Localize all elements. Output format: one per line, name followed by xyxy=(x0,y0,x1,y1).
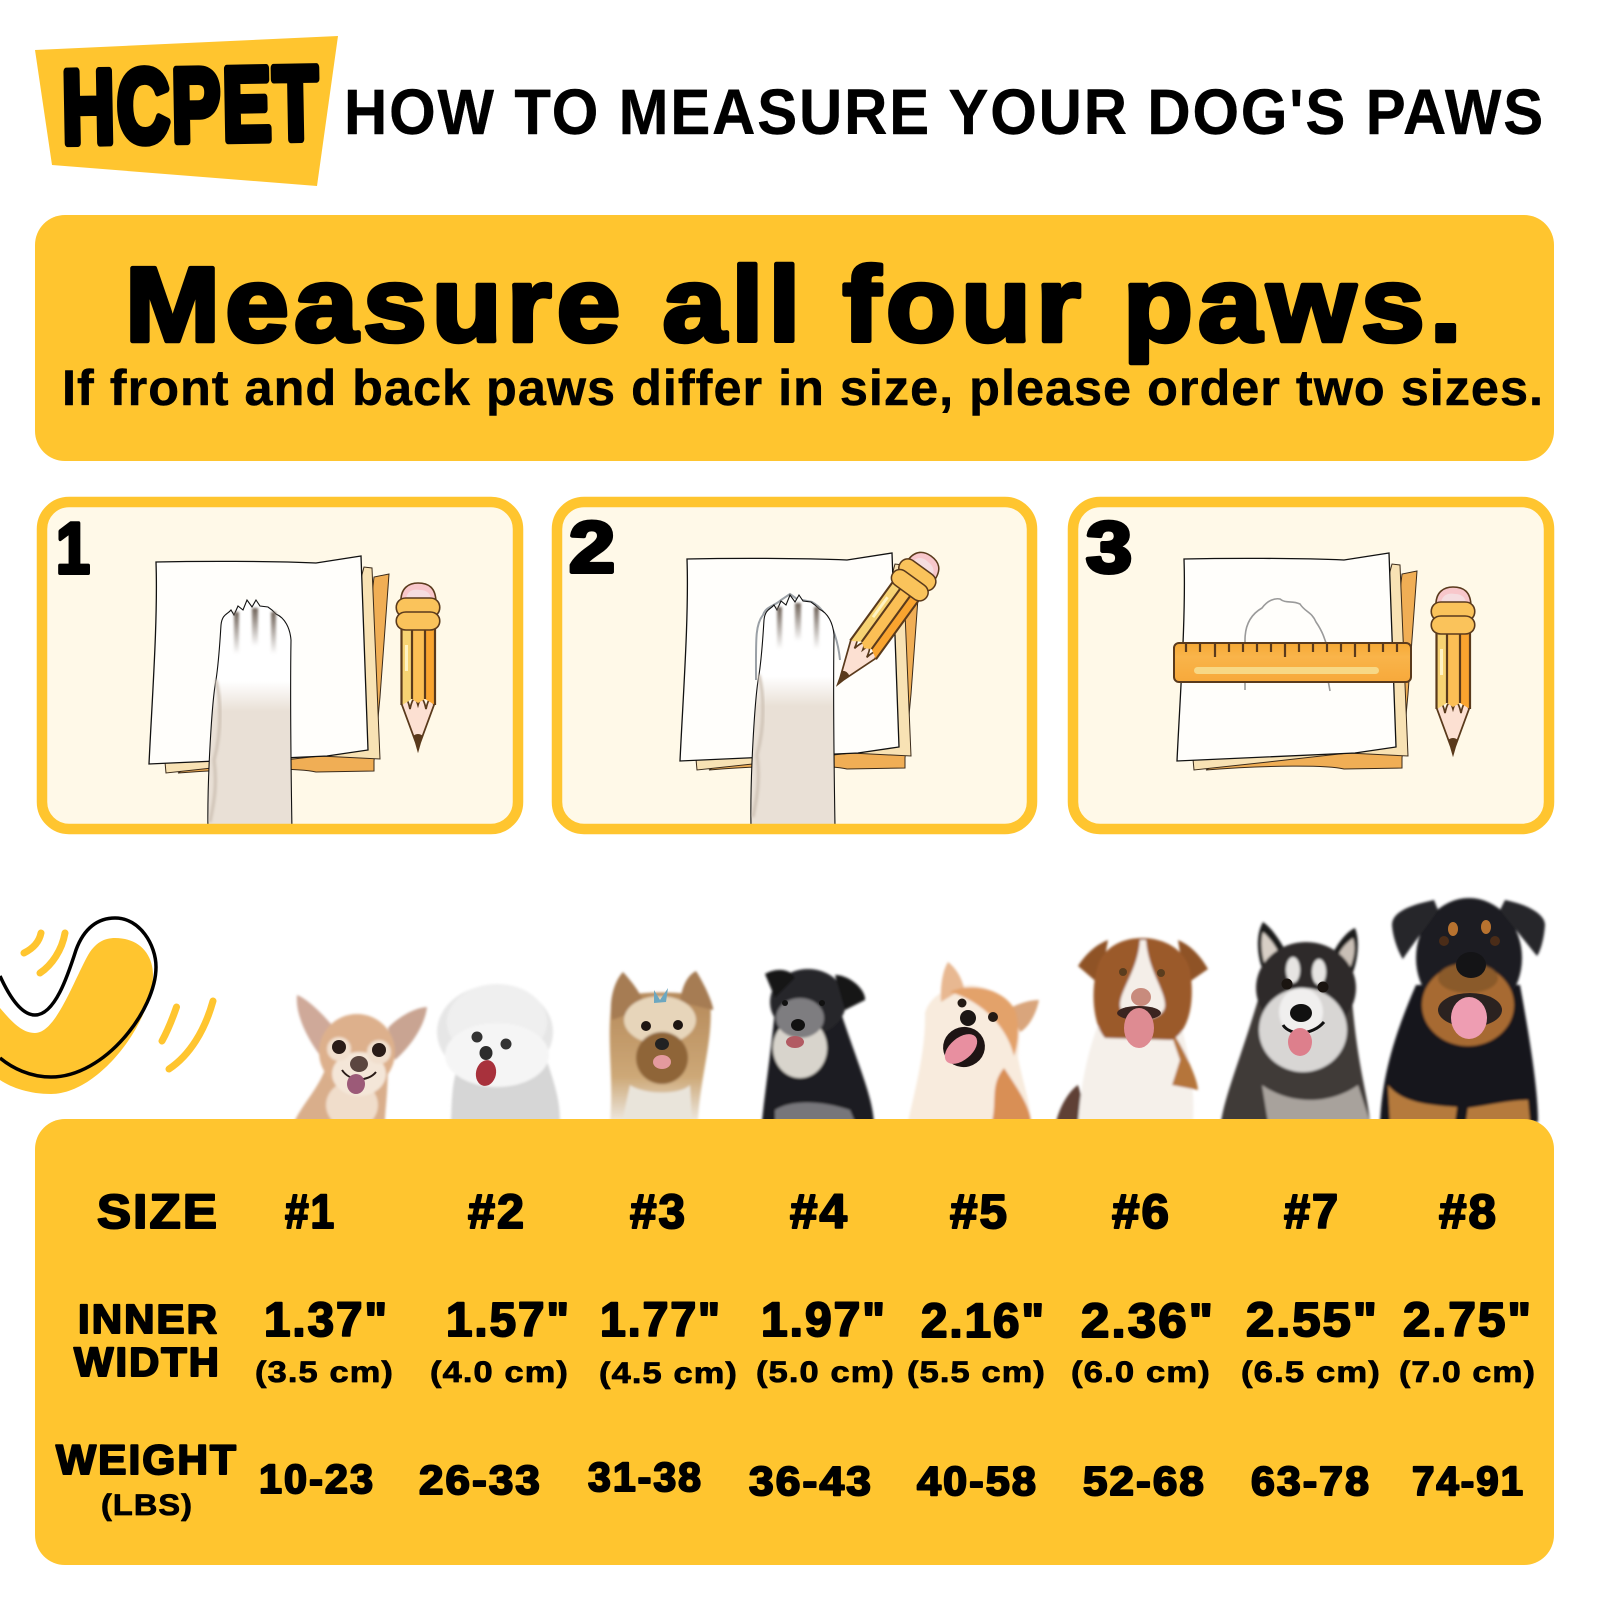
row: inner width: 1.37" xyxy=(264,1294,389,1347)
row: weight: 63-78 xyxy=(1251,1458,1371,1504)
row: inner width: 1.97" xyxy=(761,1294,887,1347)
row: weight: 74-91 xyxy=(1412,1458,1525,1504)
row: inner width: (5.5 cm) xyxy=(907,1356,1046,1389)
ruler xyxy=(1174,643,1411,682)
row: inner width: (7.0 cm) xyxy=(1399,1356,1536,1389)
step number 3: 3 xyxy=(1086,508,1132,588)
panel: step 1 xyxy=(42,502,518,832)
row: inner width: 1.77" xyxy=(600,1294,722,1347)
row: weight: 10-23 xyxy=(259,1456,375,1502)
logo: HCPET xyxy=(61,46,321,166)
row: inner width: 1.57" xyxy=(446,1294,571,1347)
row: inner width: WIDTH xyxy=(74,1339,221,1385)
row: size: #4 xyxy=(790,1186,849,1239)
row: inner width: (6.5 cm) xyxy=(1241,1356,1381,1389)
step number 1: 1 xyxy=(56,509,90,589)
dog 8: rottweiler xyxy=(1380,898,1545,1122)
row: weight: (LBS) xyxy=(101,1489,193,1522)
row: size: #5 xyxy=(950,1186,1009,1239)
row: size: #2 xyxy=(468,1186,526,1239)
row: inner width: 2.16" xyxy=(921,1295,1046,1348)
row: weight xyxy=(56,1436,1525,1522)
row: weight: 36-43 xyxy=(749,1458,873,1504)
step number 2: 2 xyxy=(569,508,615,588)
row: inner width: INNER xyxy=(78,1296,219,1342)
row: weight: 31-38 xyxy=(588,1454,703,1500)
decorative swoosh xyxy=(0,918,213,1094)
row: inner width: 2.55" xyxy=(1246,1294,1379,1347)
row: inner width: (5.0 cm) xyxy=(756,1356,895,1389)
row: inner width xyxy=(74,1294,1536,1390)
row: inner width: (6.0 cm) xyxy=(1071,1356,1211,1389)
dog 6: australian shepherd xyxy=(1056,938,1208,1122)
heading: Measure all four paws. xyxy=(125,246,1467,364)
dog 5: shiba xyxy=(908,962,1039,1122)
panel: step 3 xyxy=(1073,502,1549,829)
row: size xyxy=(97,1186,1498,1239)
dog 7: husky xyxy=(1221,922,1370,1122)
dog 3: yorkie xyxy=(610,971,713,1122)
row: weight: 40-58 xyxy=(917,1458,1038,1504)
row: size: #1 xyxy=(285,1186,336,1239)
logo xyxy=(35,36,338,186)
row: size: #6 xyxy=(1112,1186,1171,1239)
dog 4: schnauzer xyxy=(762,969,874,1122)
row: inner width: (3.5 cm) xyxy=(255,1356,394,1389)
title: HOW TO MEASURE YOUR DOG'S PAWS xyxy=(344,76,1545,148)
dog 2: bichon xyxy=(437,984,560,1122)
row: inner width: 2.36" xyxy=(1081,1295,1215,1348)
panel: measure all four paws banner xyxy=(35,215,1554,461)
row: weight: WEIGHT xyxy=(56,1436,238,1483)
row: size: #7 xyxy=(1284,1186,1340,1239)
row: size: #3 xyxy=(630,1186,687,1239)
dog 1: chihuahua xyxy=(294,995,427,1129)
row: weight: 52-68 xyxy=(1083,1458,1206,1504)
row: size: SIZE xyxy=(97,1186,219,1239)
row: inner width: (4.0 cm) xyxy=(430,1356,569,1389)
row: size: #8 xyxy=(1439,1186,1498,1239)
row: inner width: (4.5 cm) xyxy=(599,1357,738,1390)
traced paw outline xyxy=(1245,599,1330,691)
panel: size table xyxy=(35,1119,1554,1565)
panel: step 2 xyxy=(557,502,1032,829)
subheading: If front and back paws differ in size, please order two sizes. xyxy=(62,360,1544,416)
row: inner width: 2.75" xyxy=(1403,1294,1533,1347)
row: weight: 26-33 xyxy=(419,1457,542,1503)
